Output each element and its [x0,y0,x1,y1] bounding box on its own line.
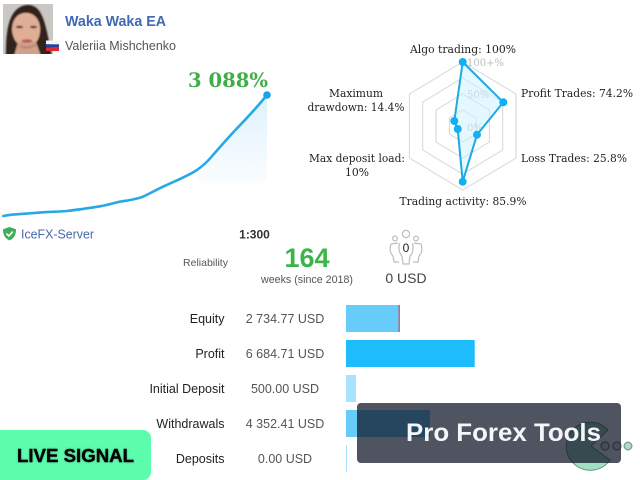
row: profit: Profit [195,347,225,361]
radar chart [409,58,516,190]
row: equity: 2 734.77 USD [246,312,324,326]
leverage: 1:300 [239,228,270,242]
radar label: trading activity: Trading activity: 85.9% [400,194,527,208]
weeks count: 164 [284,243,330,273]
radar label: maximum drawdown: Maximum [329,86,383,100]
radar label: max deposit load: Max deposit load: [309,151,405,165]
row: initial deposit: 500.00 USD [251,382,319,396]
icon: pacman logo [566,422,632,470]
panel: pro forex tools banner [357,403,621,463]
row: withdrawals: Withdrawals [156,417,224,431]
reliability label: Reliability [183,257,229,269]
row: initial deposit: Initial Deposit [149,382,225,396]
row: deposits: Deposits [176,452,224,466]
row: equity [190,305,400,332]
panel: live signal badge [0,430,151,480]
row: equity: Equity [190,312,225,326]
server name: IceFX-Server [21,228,94,242]
radar label: maximum drawdown: drawdown: 14.4% [308,100,405,114]
radar label: profit trades: Profit Trades: 74.2% [521,86,633,100]
radar label: max deposit load [309,151,405,179]
radar label: loss trades: Loss Trades: 25.8% [521,151,627,165]
radar label: algo trading: Algo trading: 100% [409,42,516,56]
icon: verified shield [3,227,16,240]
icon: Russian flag [46,40,59,51]
subscription price: 0 USD [385,270,427,286]
radar label: maximum drawdown [308,86,405,114]
radar label: max deposit load: 10% [345,165,369,179]
radar chart: 0% [467,123,483,134]
panel: live signal badge: LIVE SIGNAL [17,445,134,466]
weeks caption: weeks (since 2018) [260,274,353,286]
icon: subscribers people [390,230,422,264]
row: withdrawals [156,410,430,437]
title: Waka Waka EA [65,14,167,30]
row: profit [195,340,475,367]
row: deposits: 0.00 USD [258,452,312,466]
growth line chart [3,91,271,216]
panel: live signal badge: LIVE SIGNAL [17,445,134,466]
row: withdrawals: 4 352.41 USD [246,417,324,431]
avatar portrait [3,4,53,56]
growth percentage: 3 088% [188,68,268,92]
author name: Valeriia Mishchenko [65,39,176,53]
row: profit: 6 684.71 USD [246,347,324,361]
radar chart: 50% [467,90,489,101]
row: deposits [176,445,347,472]
radar chart: 100+% [467,58,504,69]
panel: pro forex tools banner: Pro Forex Tools [406,419,601,447]
row: initial deposit [149,375,356,402]
subscribers count: 0 [403,241,410,255]
